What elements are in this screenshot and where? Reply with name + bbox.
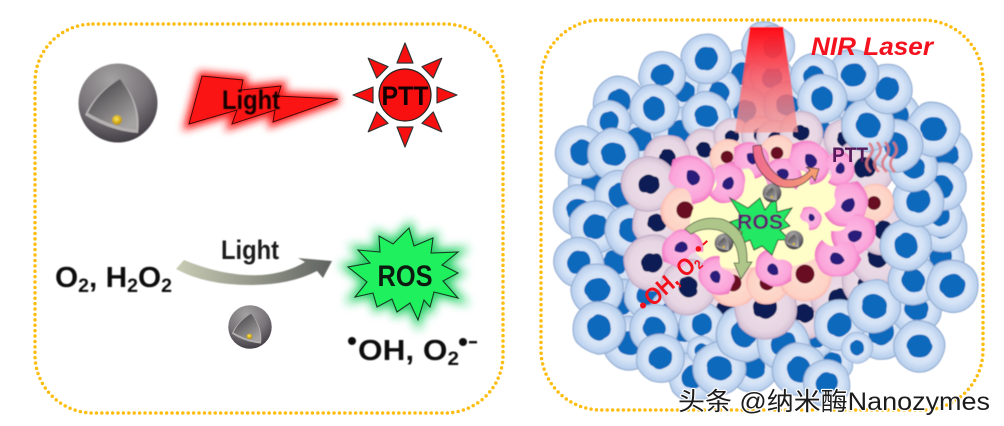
NIR laser label: NIR Laser	[811, 33, 934, 61]
healthy blue cells: front layer	[546, 30, 989, 413]
mauve tumor cells: left and top	[613, 103, 831, 348]
ROS species label	[632, 235, 720, 318]
cancer stroma background	[647, 126, 883, 318]
burst: ROS in tumor	[730, 196, 792, 255]
reactants label: 2	[161, 276, 172, 297]
reactants label: O	[55, 262, 78, 294]
burst: ROS in tumor: ROS	[737, 211, 783, 234]
panel: left border	[35, 24, 503, 413]
arrow: light reaction	[176, 258, 332, 285]
necrotic yellow core	[690, 164, 848, 269]
products label: OH, O	[358, 335, 440, 367]
tumor cell cluster	[546, 13, 989, 413]
reactants label: , H	[89, 262, 127, 294]
heat waves	[866, 142, 896, 172]
reactants label: 2	[127, 276, 138, 297]
icon: ROS burst: ROS	[378, 260, 432, 293]
panel: right border	[541, 20, 983, 410]
peach tumor cells	[651, 135, 894, 311]
reactants label: 2	[78, 276, 89, 297]
arrow: PTT pathway	[753, 145, 819, 188]
ROS species label: OH, O	[639, 246, 707, 312]
light label: Light	[221, 235, 279, 265]
arrow: ROS pathway	[685, 218, 752, 279]
icon: nanoparticle small	[228, 305, 272, 349]
watermark: 头条 @纳米酶Nanozymes	[678, 388, 990, 416]
products label	[348, 335, 477, 370]
icon: PTT sun	[353, 43, 457, 147]
laser beam	[735, 27, 798, 133]
icon: nanoparticle large	[78, 64, 158, 142]
products label: 2	[447, 349, 459, 370]
icon: light lightning bolt	[189, 76, 338, 124]
healthy blue cells: back layer	[549, 13, 978, 409]
PTT tumor label: PTT	[832, 144, 868, 167]
icon: ROS burst	[348, 228, 458, 320]
nanoparticles in tumor	[715, 184, 803, 252]
pink damaged cells	[655, 135, 883, 301]
mauve tumor cells: right side	[689, 115, 919, 350]
icon: light lightning bolt: Light	[222, 85, 280, 115]
ROS species label: 2	[691, 257, 706, 272]
reactants label: O	[138, 262, 161, 294]
icon: PTT sun: PTT	[382, 81, 429, 111]
